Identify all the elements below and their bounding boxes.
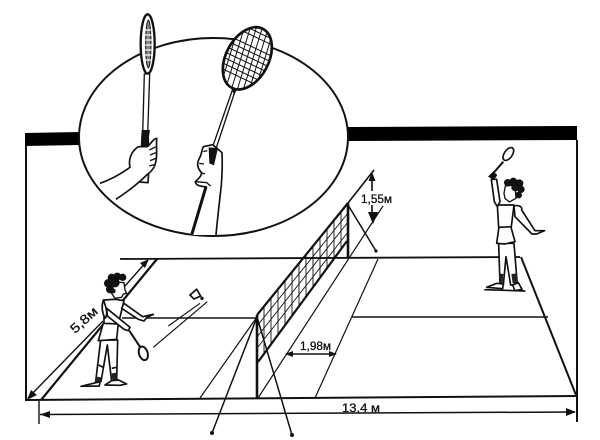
net [210, 203, 378, 437]
shuttlecock with flight lines [153, 289, 207, 347]
arm raised [491, 179, 500, 207]
head [112, 282, 127, 298]
legs [499, 243, 517, 285]
shadow line [484, 290, 525, 291]
legs [96, 340, 118, 382]
player left with racket [81, 273, 153, 386]
arms [122, 303, 153, 321]
circular inset [79, 14, 348, 236]
dimension: width 5,8 m: 5,8м [67, 304, 101, 336]
inset: racket face-on [212, 26, 274, 148]
inset: racket edge-on [141, 14, 155, 147]
torso [104, 299, 124, 324]
curly hair [104, 273, 126, 293]
dimension: length 13,4 m [39, 401, 576, 424]
dimension: service zone 1,98 m: 1,98м [300, 341, 331, 353]
dimension: length 13,4 m: 13,4 м [342, 401, 380, 415]
shorts [98, 323, 118, 341]
dimension: net height 1,55 m [348, 170, 392, 224]
shorts [497, 226, 515, 244]
head [504, 185, 516, 202]
guy wires [212, 205, 376, 435]
dimension: width 5,8 m [27, 259, 149, 400]
court lines [41, 206, 576, 400]
arm right [514, 206, 545, 234]
inset: hand gripping racket side-on [100, 130, 157, 199]
curly hair [504, 178, 525, 198]
shoes [81, 380, 127, 386]
dimension: net height 1,55 m: 1,55м [361, 194, 392, 206]
hall frame [26, 140, 577, 422]
player right serving [484, 146, 545, 291]
dimension: service zone 1,98 m [285, 341, 337, 357]
black wall band [25, 126, 577, 146]
torso [497, 205, 514, 227]
racket [492, 162, 503, 175]
inset: hand gripping racket face-on [192, 145, 222, 235]
shoes [487, 283, 522, 291]
racket [129, 331, 141, 348]
